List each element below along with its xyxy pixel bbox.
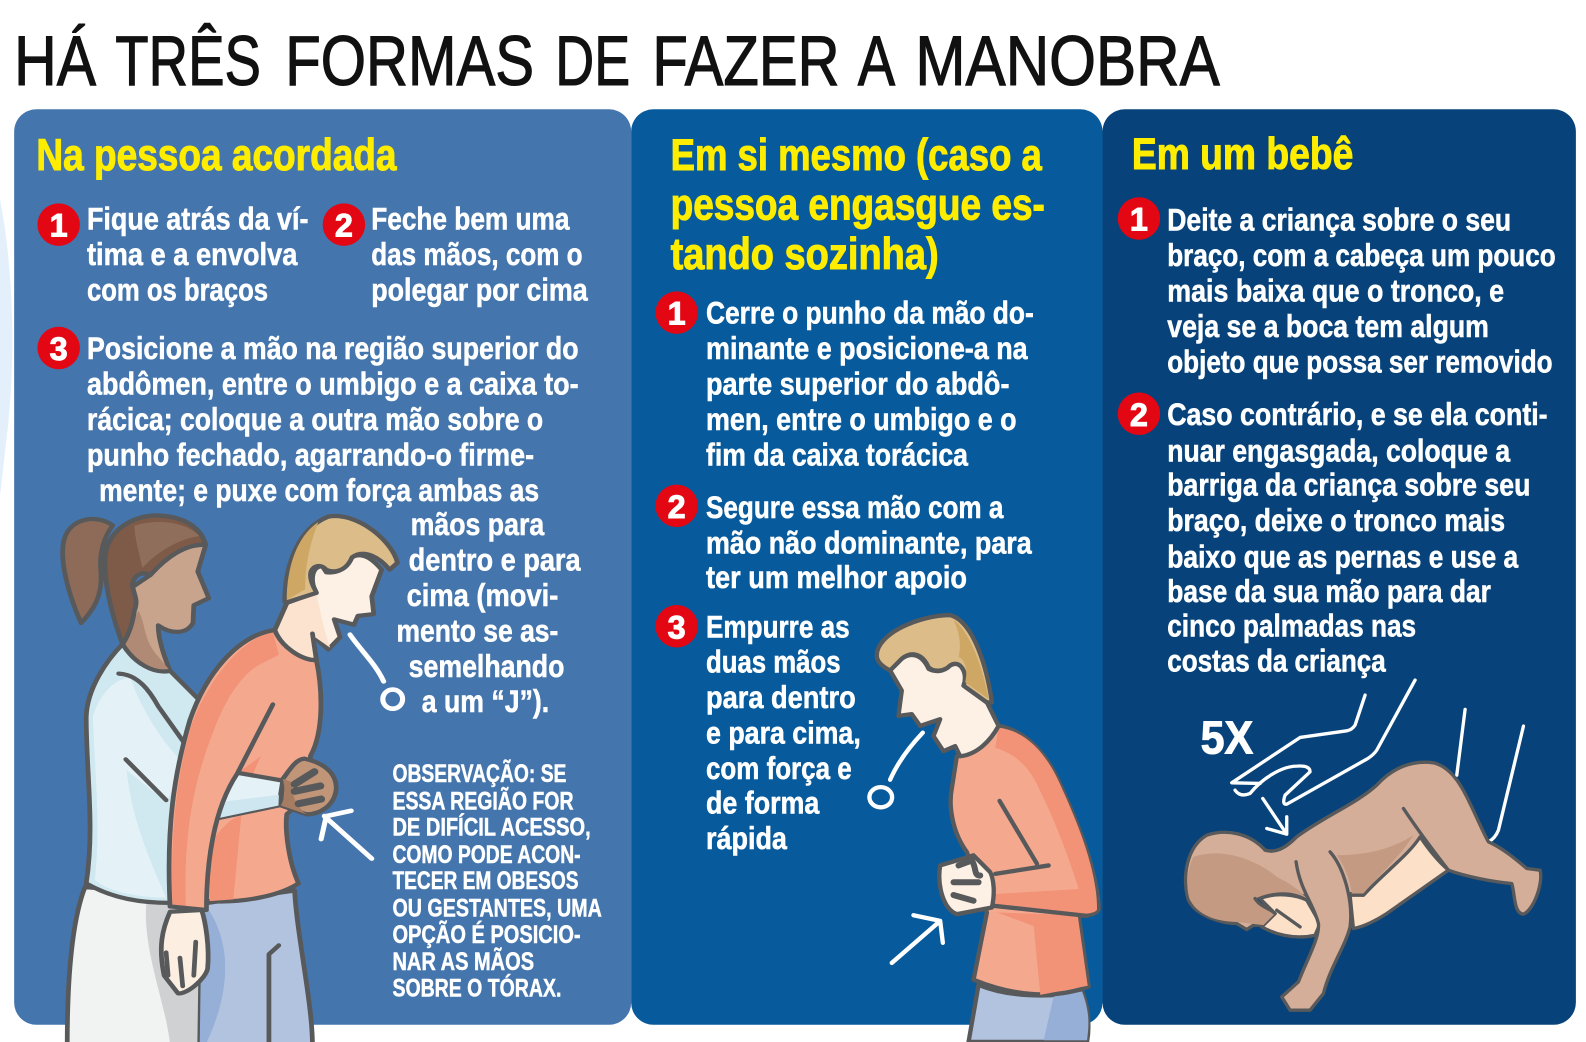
torso — [170, 630, 321, 906]
step 2 badge — [655, 485, 698, 527]
step 2 text: das mãos, com o — [371, 237, 583, 272]
step 2 text — [1167, 397, 1548, 679]
step 2 badge: 2 — [1130, 397, 1148, 433]
observation note: OBSERVAÇÃO: SE — [392, 758, 566, 788]
step 3 text: duas mãos — [706, 645, 841, 680]
step 1 text: minante e posicione-a na — [706, 331, 1028, 366]
face — [890, 655, 999, 756]
illustration: man alone — [869, 615, 1099, 1042]
step 1 text: Deite a criança sobre o seu — [1167, 203, 1511, 238]
step 3 badge — [655, 605, 698, 647]
step 3 text: dentro e para — [409, 543, 581, 578]
heading: em si mesmo: tando sozinha) — [671, 230, 939, 279]
step 1 badge — [1118, 197, 1160, 240]
step 3 text: abdômen, entre o umbigo e a caixa to- — [87, 367, 579, 402]
step 3 text: mãos para — [411, 507, 545, 542]
step 1 text — [706, 296, 1034, 472]
step 3 text: mento se as- — [396, 613, 558, 648]
step 1 badge: 1 — [668, 296, 686, 332]
observation note: OPÇÃO É POSICIO- — [392, 919, 581, 949]
step 2 text: Segure essa mão com a — [706, 490, 1004, 525]
step 2 text: ter um melhor apoio — [706, 560, 967, 595]
hands — [939, 855, 994, 914]
title: HÁ — [14, 22, 97, 101]
step 2 text: braço, deixe o tronco mais — [1167, 503, 1505, 538]
heading: em um bebê: Em um bebê — [1132, 130, 1353, 179]
step 3 text: rácica; coloque a outra mão sobre o — [87, 402, 543, 437]
vomit trajectory — [350, 635, 403, 709]
vomit trajectory — [869, 733, 923, 807]
step 1 text: Cerre o punho da mão do- — [706, 296, 1034, 331]
step 2 text: cinco palmadas nas — [1167, 608, 1416, 643]
step 3 text: e para cima, — [706, 716, 861, 751]
observation note: TECER EM OBESOS — [392, 867, 579, 895]
step 2 text: base da sua mão para dar — [1167, 574, 1491, 609]
step 1 badge — [37, 203, 80, 246]
heading: em si mesmo — [671, 131, 1045, 279]
step 1 text: fim da caixa torácica — [706, 437, 968, 472]
arrow — [1263, 798, 1287, 834]
step 1 text: Fique atrás da ví- — [87, 202, 309, 237]
step 1 text: tima e a envolva — [87, 237, 298, 272]
woman — [63, 516, 237, 1042]
step 1 badge: 1 — [50, 208, 68, 244]
step 2 text — [371, 202, 588, 307]
illustration: woman and man performing the maneuver — [63, 516, 403, 1042]
step 3 text: com força e — [706, 751, 852, 786]
step 2 text: baixo que as pernas e use a — [1167, 540, 1519, 575]
title: FAZER — [652, 22, 840, 101]
title: TRÊS — [115, 22, 261, 101]
step 3 text: Empurre as — [706, 609, 850, 644]
step 2 text: polegar por cima — [371, 272, 588, 307]
observation note: ESSA REGIÃO FOR — [392, 785, 574, 815]
step 2 badge: 2 — [668, 489, 686, 525]
step 1 badge: 1 — [1130, 202, 1148, 238]
observation note: DE DIFÍCIL ACESSO, — [392, 813, 591, 842]
step 3 text: semelhando — [409, 649, 564, 684]
step 2 text — [706, 490, 1032, 595]
heading: em si mesmo: Em si mesmo (caso a — [671, 131, 1043, 180]
torso — [951, 726, 1099, 995]
woman's forearm and hands — [219, 759, 336, 818]
step 3 text: de forma — [706, 785, 820, 820]
step 3 badge — [37, 327, 80, 369]
heading: na pessoa acordada: Na pessoa acordada — [36, 131, 398, 180]
step 3 text: Posicione a mão na região superior do — [87, 331, 579, 366]
title: A — [858, 22, 896, 101]
panel: na pessoa acordada — [14, 109, 631, 1025]
illustration: baby and hand — [1186, 680, 1541, 1010]
step 3 text — [87, 331, 581, 719]
title — [14, 22, 1220, 101]
step 1 text: parte superior do abdô- — [706, 367, 1009, 402]
step 2 text: nuar engasgada, coloque a — [1167, 433, 1511, 468]
observation note: COMO PODE ACON- — [392, 841, 581, 869]
observation note — [392, 758, 602, 1002]
step 2 badge — [323, 203, 365, 246]
step 1 text: com os braços — [87, 272, 268, 307]
step 2 text: costas da criança — [1167, 644, 1386, 679]
step 2 badge: 2 — [335, 208, 353, 244]
heading: em si mesmo: pessoa engasgue es- — [671, 181, 1045, 230]
panel: em si mesmo — [631, 109, 1103, 1025]
observation note: NAR AS MÃOS — [392, 946, 534, 976]
hair — [877, 615, 992, 702]
step 1 text: veja se a boca tem algum — [1167, 309, 1489, 344]
step 2 text: Feche bem uma — [371, 202, 570, 237]
step 2 badge — [1118, 393, 1160, 435]
step 1 text: men, entre o umbigo e o — [706, 402, 1017, 437]
step 3 text: punho fechado, agarrando-o firme- — [87, 437, 534, 472]
step 3 text: a um “J”). — [422, 684, 549, 719]
step 1 text: mais baixa que o tronco, e — [1167, 273, 1504, 308]
title: DE — [555, 22, 630, 101]
arrow — [321, 811, 372, 859]
step 3 text: rápida — [706, 821, 787, 856]
title: MANOBRA — [915, 22, 1220, 101]
step 1 text — [1167, 203, 1556, 379]
man — [161, 516, 397, 1042]
step 3 badge: 3 — [50, 331, 68, 367]
step 3 text — [706, 609, 861, 856]
panel: em um bebê — [1103, 109, 1576, 1025]
step 2 text: mão não dominante, para — [706, 525, 1032, 560]
observation note: SOBRE O TÓRAX. — [392, 972, 561, 1002]
step 3 text: para dentro — [706, 680, 856, 715]
man's arm — [169, 630, 316, 910]
label: 5X: 5X — [1201, 712, 1253, 764]
step 1 badge — [655, 291, 698, 334]
step 1 text — [87, 202, 309, 307]
pants — [969, 985, 1088, 1042]
white outline hand and arm — [1232, 680, 1523, 842]
title: FORMAS — [285, 22, 534, 101]
arrow — [892, 915, 943, 963]
observation note: OU GESTANTES, UMA — [392, 895, 602, 923]
step 3 text: mente; e puxe com força ambas as — [99, 473, 539, 508]
step 2 text: barriga da criança sobre seu — [1167, 468, 1530, 503]
step 3 badge: 3 — [668, 609, 686, 645]
baby — [1186, 762, 1541, 1010]
step 3 text: cima (movi- — [407, 578, 558, 613]
